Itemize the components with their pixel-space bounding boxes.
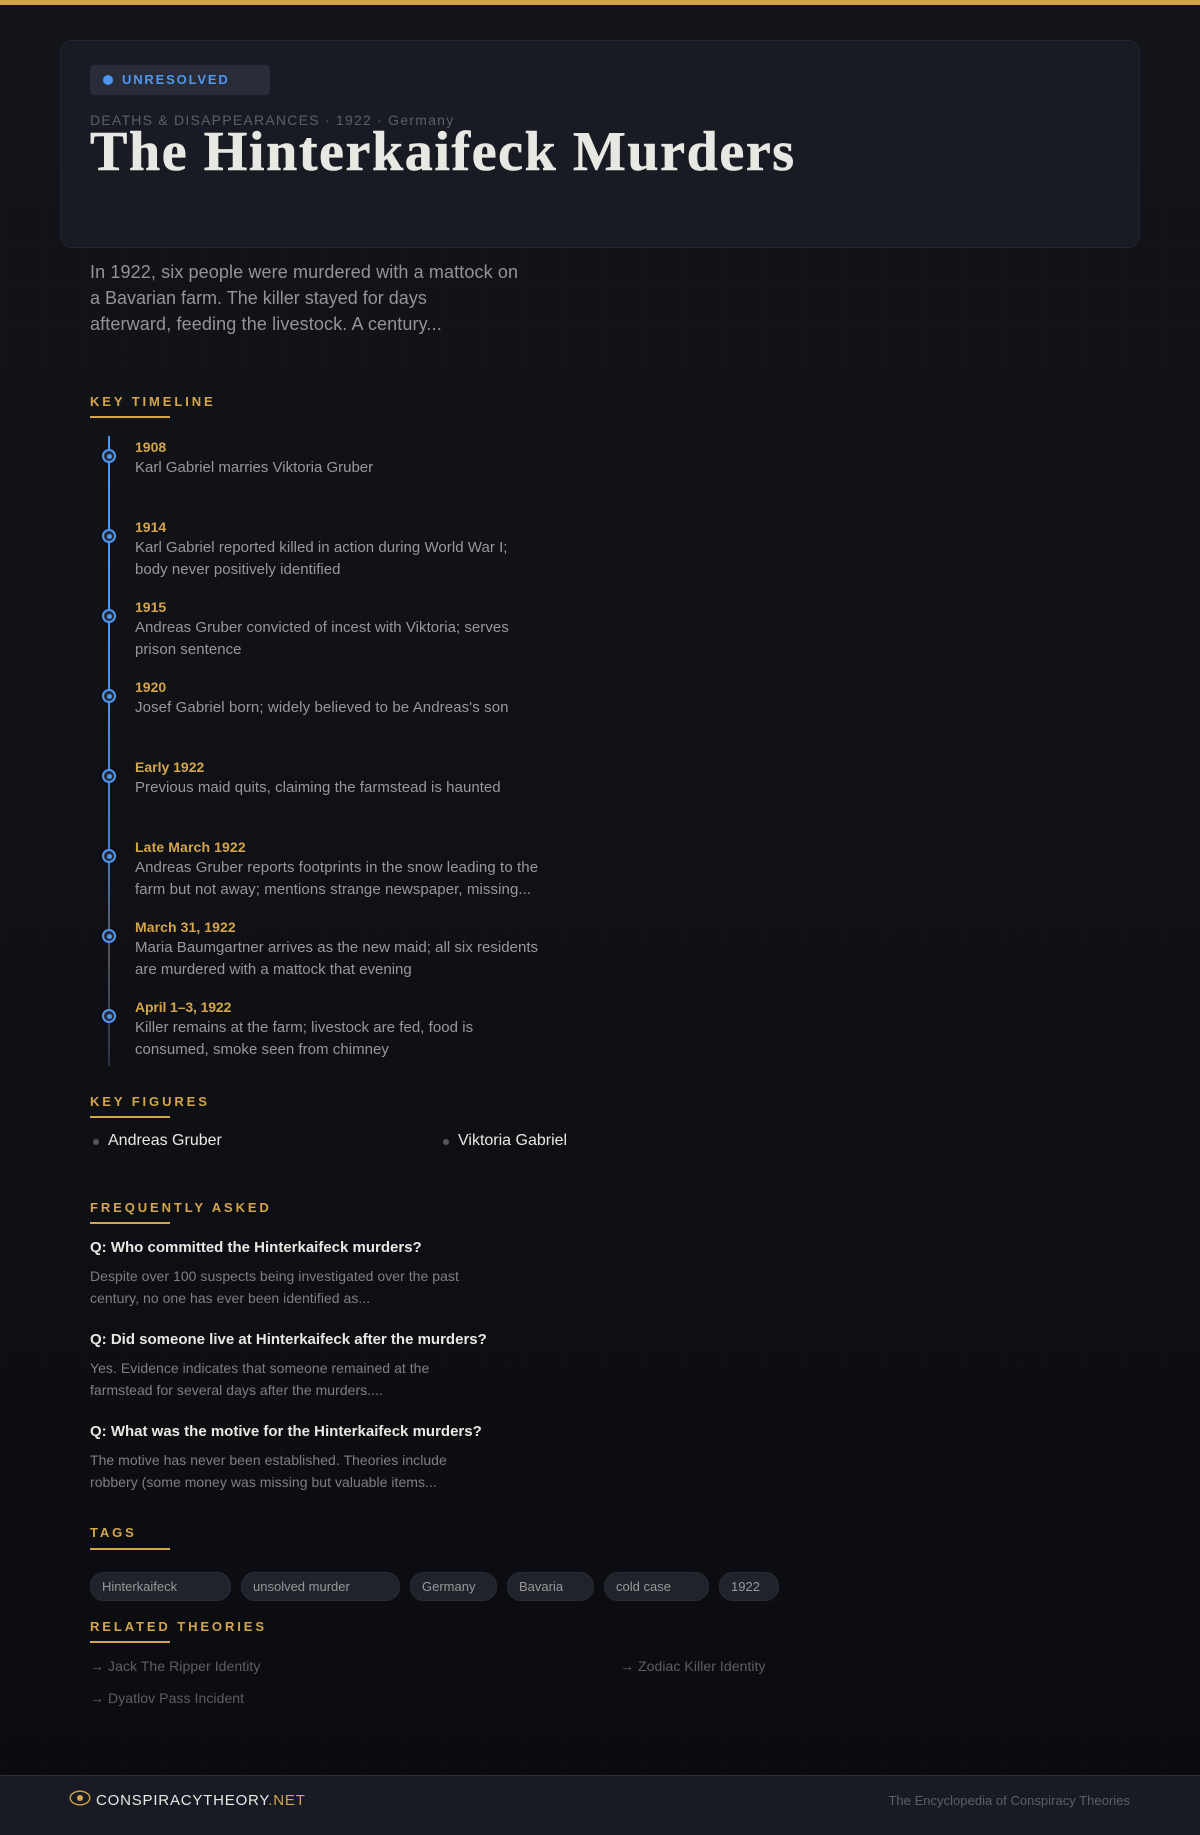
intro text — [90, 262, 518, 334]
timeline entry: late March 1922 — [135, 839, 538, 898]
faq item 2 — [90, 1331, 487, 1398]
timeline entry: early 1922: Previous maid quits, claiming the farmstead is haunted — [135, 779, 501, 796]
faq item 3 — [90, 1423, 482, 1490]
tag: unsolved murder — [253, 1579, 350, 1594]
timeline entry: 1920: 1920 — [135, 679, 166, 695]
tag — [604, 1572, 709, 1601]
faq item 2: farmstead for several days after the murders.... — [90, 1382, 383, 1398]
timeline line — [108, 436, 110, 1066]
tag: Bavaria — [519, 1579, 563, 1594]
timeline entry: 1915: Andreas Gruber convicted of incest with Viktoria; serves — [135, 619, 509, 636]
timeline entry: April 1-3 1922 — [135, 999, 473, 1058]
tag — [241, 1572, 400, 1601]
timeline entry: early 1922 — [135, 759, 501, 796]
timeline entry: 1908: 1908 — [135, 439, 166, 455]
timeline node: March 31 1922 — [102, 929, 116, 943]
badge label: UNRESOLVED — [122, 72, 230, 87]
timeline node: 1908 — [102, 449, 116, 463]
timeline entry: March 31 1922: Maria Baumgartner arrives as the new maid; all six residents — [135, 939, 538, 956]
timeline entry: late March 1922: Andreas Gruber reports footprints in the snow leading to the — [135, 859, 538, 876]
category line: DEATHS & DISAPPEARANCES · 1922 · Germany — [90, 112, 454, 128]
related link: → Zodiac Killer Identity — [620, 1658, 766, 1674]
icon: status dot — [103, 75, 113, 85]
heading: tags: TAGS — [90, 1525, 137, 1540]
timeline entry: 1920 — [135, 679, 509, 716]
tag — [90, 1572, 231, 1601]
faq item 2: Q: Did someone live at Hinterkaifeck after the murders? — [90, 1331, 487, 1348]
tag — [719, 1572, 779, 1601]
timeline entry: 1915: 1915 — [135, 599, 166, 615]
panel: footer — [0, 1775, 1200, 1835]
timeline entry: 1914: body never positively identified — [135, 561, 341, 578]
tag — [410, 1572, 497, 1601]
faq item 3: robbery (some money was missing but valuable items... — [90, 1474, 437, 1490]
tag — [507, 1572, 594, 1601]
faq item 1: Q: Who committed the Hinterkaifeck murders? — [90, 1239, 422, 1256]
timeline entry: March 31 1922 — [135, 919, 538, 978]
faq item 1 — [90, 1239, 459, 1306]
icon: eye logo — [70, 1790, 90, 1806]
heading: related theories: RELATED THEORIES — [90, 1619, 267, 1634]
timeline entry: early 1922: Early 1922 — [135, 759, 204, 775]
timeline node: early 1922 — [102, 769, 116, 783]
top accent bar — [0, 0, 1200, 5]
related link: → Jack The Ripper Identity — [90, 1658, 260, 1674]
status badge — [90, 65, 270, 95]
tag: 1922 — [731, 1579, 760, 1594]
timeline entry: 1908: Karl Gabriel marries Viktoria Gruber — [135, 459, 373, 476]
title: The Hinterkaifeck Murders — [90, 121, 796, 183]
intro text: a Bavarian farm. The killer stayed for days — [90, 288, 427, 308]
timeline entry: late March 1922: farm but not away; mentions strange newspaper, missing... — [135, 881, 531, 898]
tag: Hinterkaifeck — [102, 1579, 177, 1594]
timeline entry: April 1-3 1922: consumed, smoke seen from chimney — [135, 1041, 389, 1058]
timeline entry: 1915: prison sentence — [135, 641, 242, 658]
intro text: afterward, feeding the livestock. A century... — [90, 314, 442, 334]
tag: Germany — [422, 1579, 475, 1594]
timeline node: 1920 — [102, 689, 116, 703]
intro text: In 1922, six people were murdered with a mattock on — [90, 262, 518, 282]
timeline entry: 1914: 1914 — [135, 519, 166, 535]
timeline node: late March 1922 — [102, 849, 116, 863]
timeline node: 1915 — [102, 609, 116, 623]
heading: key figures: KEY FIGURES — [90, 1094, 210, 1109]
timeline entry: March 31 1922: are murdered with a mattock that evening — [135, 961, 412, 978]
timeline entry: April 1-3 1922: April 1–3, 1922 — [135, 999, 231, 1015]
tag: cold case — [616, 1579, 671, 1594]
footer tagline: The Encyclopedia of Conspiracy Theories — [888, 1793, 1130, 1808]
timeline entry: late March 1922: Late March 1922 — [135, 839, 246, 855]
footer logo text: CONSPIRACYTHEORY.NET — [96, 1792, 306, 1809]
figure: Andreas Gruber: Andreas Gruber — [108, 1132, 222, 1149]
faq item 3: The motive has never been established. Theories include — [90, 1452, 447, 1468]
timeline entry: 1920: Josef Gabriel born; widely believed to be Andreas's son — [135, 699, 509, 716]
heading: key timeline: KEY TIMELINE — [90, 394, 216, 409]
heading: frequently asked: FREQUENTLY ASKED — [90, 1200, 272, 1215]
timeline entry: 1915 — [135, 599, 509, 658]
faq item 3: Q: What was the motive for the Hinterkaifeck murders? — [90, 1423, 482, 1440]
faq item 2: Yes. Evidence indicates that someone remained at the — [90, 1360, 429, 1376]
related link: → Dyatlov Pass Incident — [90, 1690, 244, 1706]
timeline entry: 1914: Karl Gabriel reported killed in action during World War I; — [135, 539, 507, 556]
panel: header card — [60, 40, 1140, 248]
faq item 1: Despite over 100 suspects being investigated over the past — [90, 1268, 459, 1284]
timeline entry: 1914 — [135, 519, 507, 578]
timeline entry: April 1-3 1922: Killer remains at the farm; livestock are fed, food is — [135, 1019, 473, 1036]
timeline node: 1914 — [102, 529, 116, 543]
timeline node: April 1-3 1922 — [102, 1009, 116, 1023]
timeline entry: March 31 1922: March 31, 1922 — [135, 919, 236, 935]
faq item 1: century, no one has ever been identified as... — [90, 1290, 370, 1306]
figure: Viktoria Gabriel: Viktoria Gabriel — [458, 1132, 567, 1149]
timeline entry: 1908 — [135, 439, 373, 476]
